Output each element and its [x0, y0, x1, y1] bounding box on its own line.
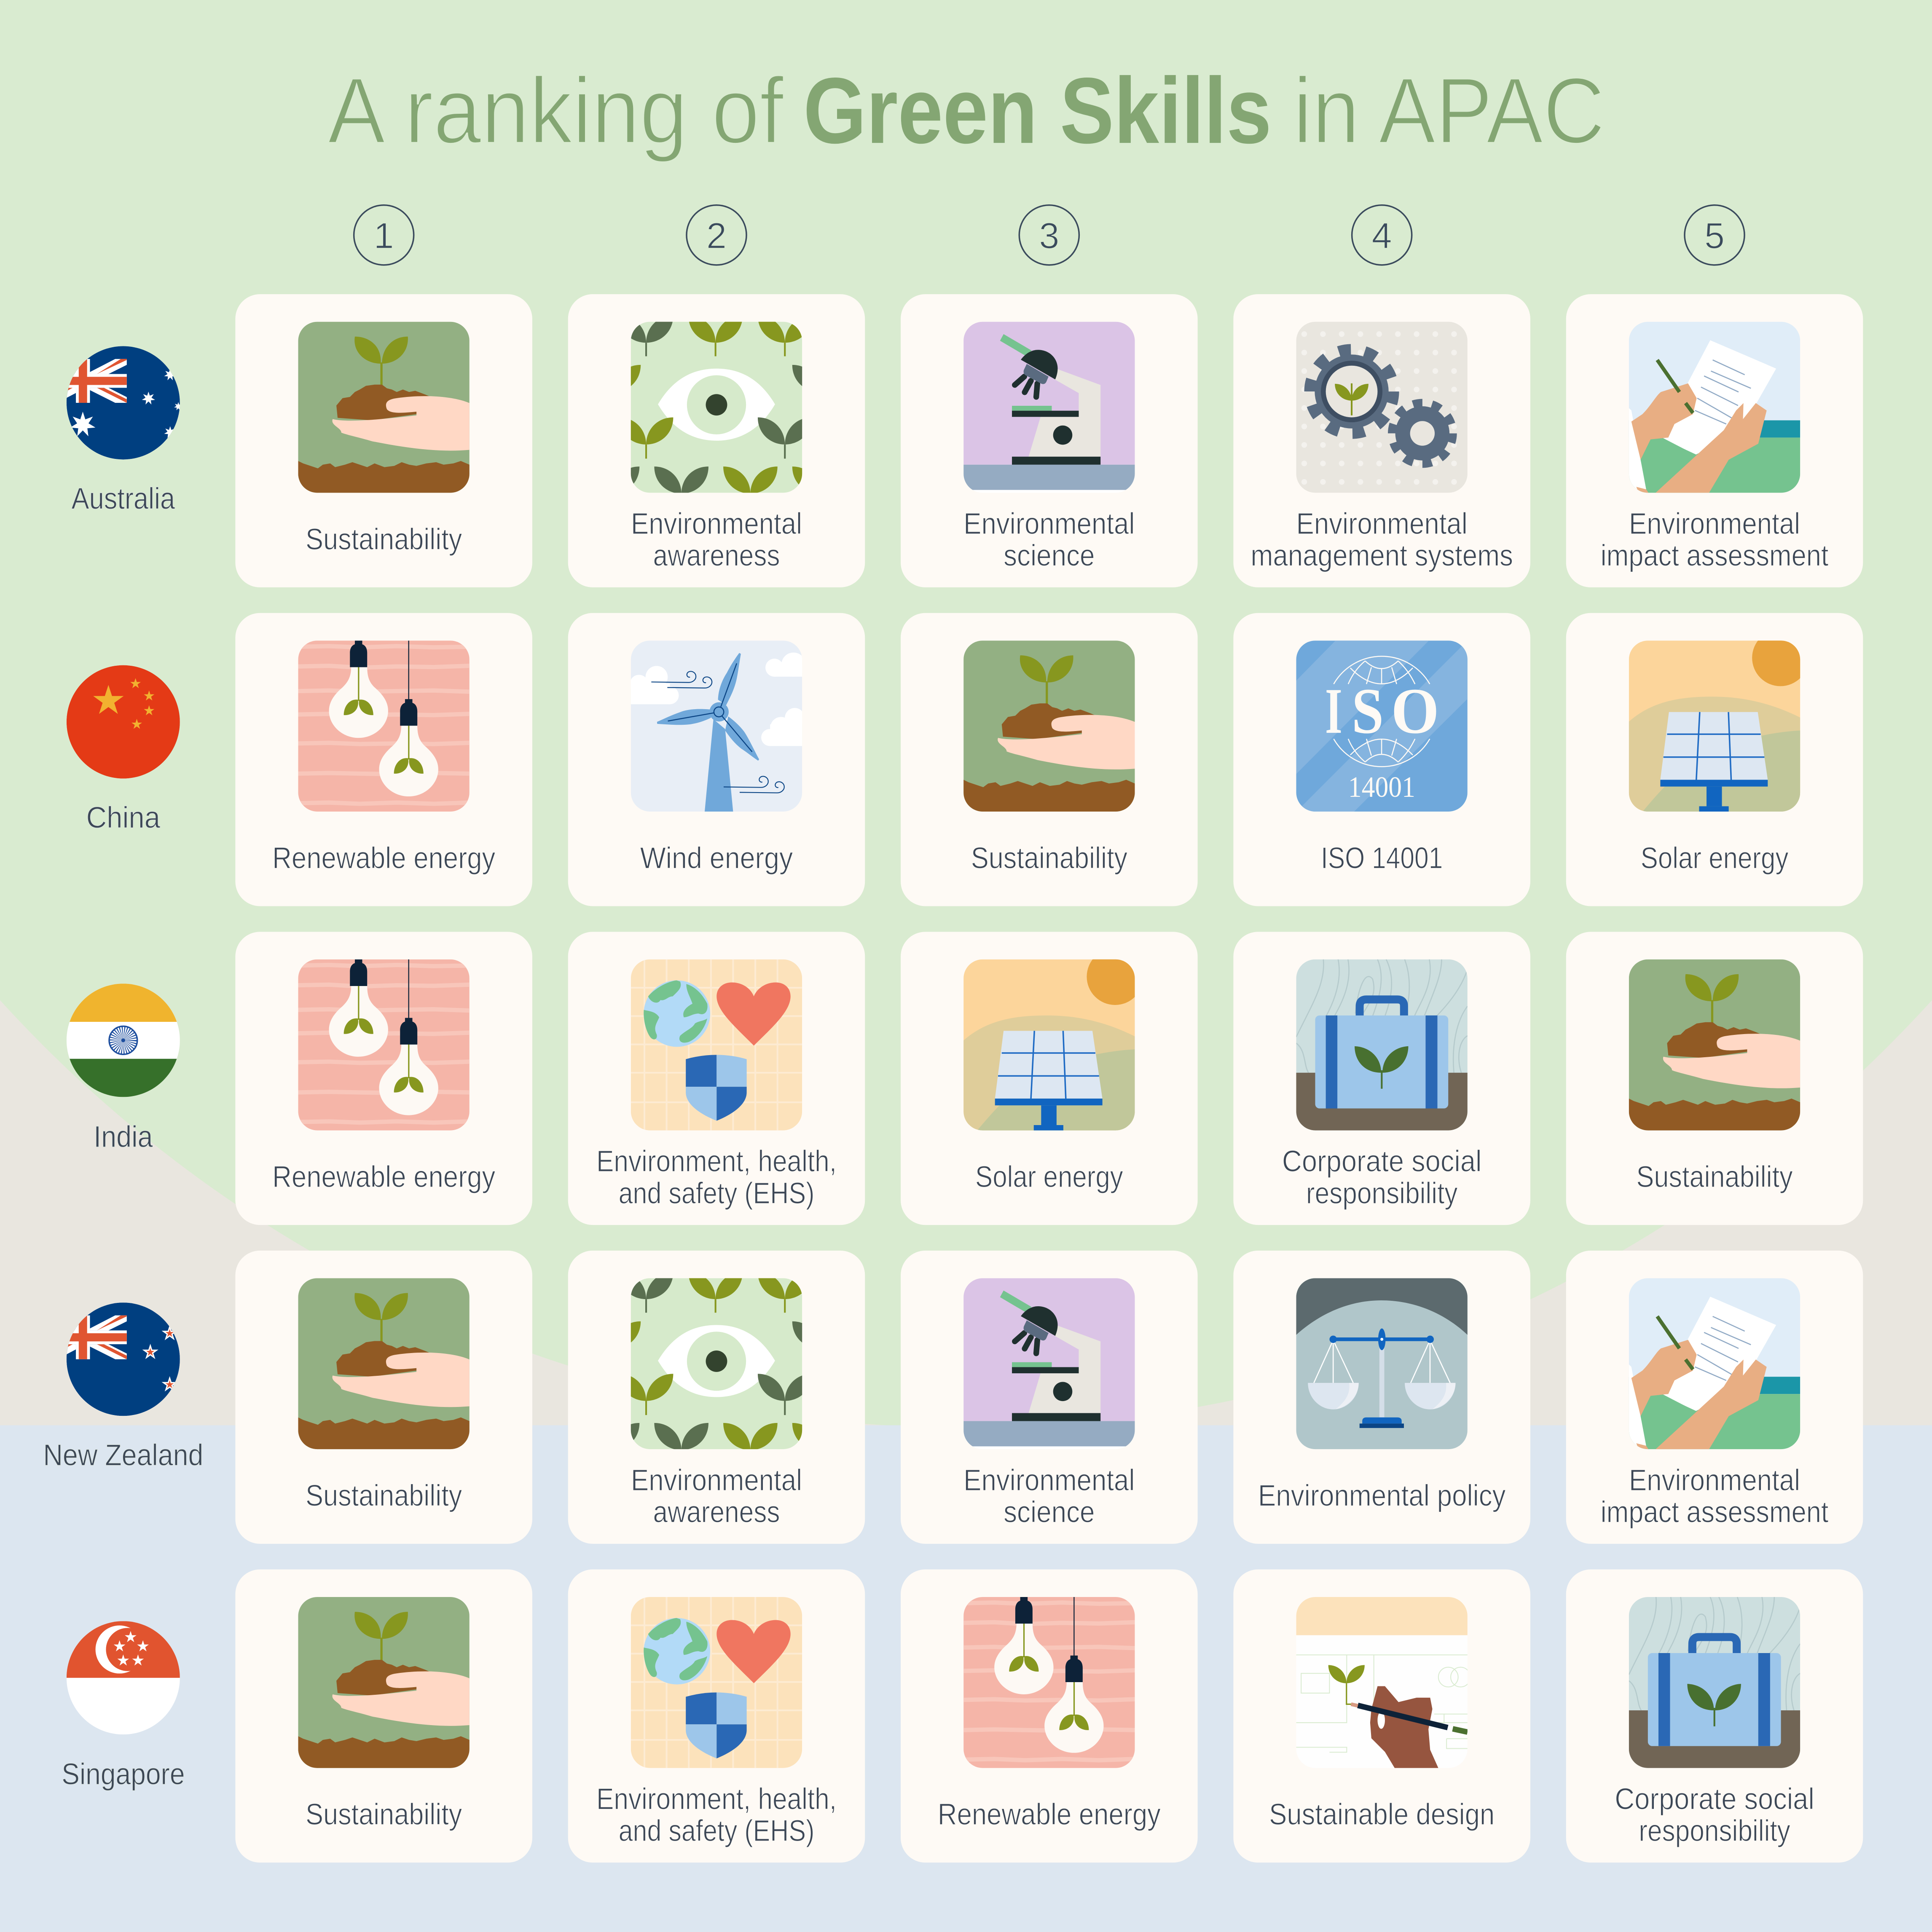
label: Renewable energy [272, 841, 496, 875]
panel: China 1 Renewable energy [235, 613, 532, 906]
icon: sprout in hand [1629, 959, 1800, 1131]
label [1250, 507, 1513, 573]
label: Environmental [1629, 1464, 1800, 1497]
label: science [1004, 1496, 1095, 1529]
label: Environmental [963, 507, 1135, 541]
panel: New Zealand 4 Environmental policy [1233, 1251, 1530, 1544]
icon: hand drawing sprout on blueprint [1296, 1597, 1470, 1768]
rank 3: 3 [1039, 216, 1059, 256]
panel: New Zealand 2 Environmental awareness [568, 1251, 865, 1544]
title: A ranking of [328, 59, 784, 163]
icon: briefcase [1296, 959, 1468, 1131]
icon: sprout in hand [963, 640, 1135, 812]
panel: New Zealand 5 Environmental impact assessment [1566, 1251, 1863, 1544]
icon: gears [1296, 322, 1468, 493]
panel: Singapore 3 Renewable energy [901, 1570, 1198, 1862]
icon: sprout in hand [298, 322, 470, 493]
icon: ISO badge [1296, 640, 1468, 812]
icon: eye and leaves [585, 316, 846, 493]
rank numbers header [354, 205, 1744, 265]
icon: solar panel [963, 948, 1143, 1131]
flag: Singapore [67, 1621, 180, 1734]
panel: India 5 Sustainability [1566, 932, 1863, 1225]
label: Sustainable design [1269, 1798, 1495, 1831]
country label: India: India [94, 1120, 153, 1154]
flag: New Zealand [67, 1302, 180, 1416]
label: Sustainability [306, 1479, 462, 1513]
title: in APAC [1293, 59, 1605, 163]
icon: solar panel [1629, 630, 1809, 812]
icon: microscope [963, 322, 1135, 493]
title: Green Skills [803, 59, 1272, 163]
rank 4 [1352, 205, 1412, 265]
icon: globe heart shield [631, 959, 802, 1131]
flag: India [67, 983, 180, 1097]
panel: China 2 Wind energy [568, 613, 865, 906]
label: Renewable energy [938, 1798, 1161, 1831]
icon: sprout in hand [298, 1278, 470, 1450]
label [631, 507, 802, 573]
label [963, 1464, 1135, 1529]
label: Solar energy [1641, 841, 1789, 875]
rank 3 [1019, 205, 1079, 265]
rank 2 [687, 205, 746, 265]
label: awareness [653, 1496, 780, 1529]
label: science [1004, 539, 1095, 573]
panel: Singapore 5 Corporate social responsibility [1566, 1570, 1863, 1862]
label [596, 1145, 837, 1210]
label: Environmental [631, 1464, 802, 1497]
panel: Australia 2 Environmental awareness [568, 294, 865, 587]
label: responsibility [1639, 1814, 1790, 1848]
label: Environmental [1629, 507, 1800, 541]
country label: New Zealand: New Zealand [43, 1439, 203, 1472]
panel: China 4 ISO 14001 [1233, 613, 1530, 906]
panel: New Zealand 1 Sustainability [235, 1251, 532, 1544]
label: Environmental policy [1258, 1479, 1506, 1513]
icon: balance scales [1296, 1278, 1468, 1450]
label: Environmental [631, 507, 802, 541]
icon: light bulbs [963, 1597, 1135, 1768]
label [631, 1464, 802, 1529]
flag: China [67, 665, 180, 779]
panel: India 2 Environment, health, and safety [568, 932, 865, 1225]
label: Corporate social [1615, 1782, 1814, 1816]
label: impact assessment [1601, 539, 1829, 573]
panel: India 3 Solar energy [901, 932, 1198, 1225]
icon: eye and leaves [585, 1272, 846, 1450]
label: and safety (EHS) [619, 1177, 814, 1210]
country label: Singapore: Singapore [62, 1758, 185, 1791]
label: Sustainability [306, 523, 462, 556]
panel: Singapore 1 Sustainability [235, 1570, 532, 1862]
label: Sustainability [971, 841, 1127, 875]
rank 2: 2 [706, 216, 727, 256]
country label: China: China [86, 801, 161, 835]
label: Sustainability [306, 1798, 462, 1831]
rank 1: 1 [374, 216, 394, 256]
label: Environment, health, [596, 1782, 837, 1816]
label [1601, 1464, 1829, 1529]
rank 1 [354, 205, 414, 265]
panel: Australia 4 Environmental management systems [1233, 294, 1530, 587]
label: and safety (EHS) [619, 1814, 814, 1848]
label: Solar energy [975, 1160, 1123, 1194]
flag: Australia [67, 346, 182, 459]
panel: Australia 3 Environmental science [901, 294, 1198, 587]
label: Environmental [1296, 507, 1468, 541]
label: Corporate social [1282, 1145, 1481, 1178]
icon: microscope [963, 1278, 1135, 1450]
icon: sprout in hand [298, 1597, 470, 1768]
icon: briefcase [1629, 1597, 1800, 1768]
icon: hands writing on paper [1629, 322, 1800, 493]
panel: Singapore 2 Environment, health, and safety [568, 1570, 865, 1862]
label: management systems [1250, 539, 1513, 573]
title [328, 59, 1605, 163]
panel: China 3 Sustainability [901, 613, 1198, 906]
country label: Australia: Australia [72, 482, 175, 515]
panel: Singapore 4 Sustainable design [1233, 1570, 1530, 1862]
icon: globe heart shield [631, 1597, 802, 1768]
label: Environment, health, [596, 1145, 837, 1178]
rank 5: 5 [1704, 216, 1725, 256]
label: Wind energy [640, 841, 793, 875]
label: Sustainability [1636, 1160, 1793, 1194]
label: awareness [653, 539, 780, 573]
panel: Australia 1 Sustainability [235, 294, 532, 587]
label [963, 507, 1135, 573]
rank 5 [1685, 205, 1744, 265]
label: Environmental [963, 1464, 1135, 1497]
icon: light bulbs [298, 640, 470, 812]
icon: light bulbs [298, 959, 470, 1131]
label: Renewable energy [272, 1160, 496, 1194]
rank 4: 4 [1372, 216, 1392, 256]
icon: wind turbine [630, 640, 805, 812]
label [1601, 507, 1829, 573]
icon: hands writing on paper [1629, 1278, 1800, 1450]
panel: Australia 5 Environmental impact assessment [1566, 294, 1863, 587]
label: ISO 14001 [1321, 841, 1443, 875]
label: responsibility [1306, 1177, 1458, 1210]
panel: China 5 Solar energy [1566, 613, 1863, 906]
label [1282, 1145, 1481, 1210]
panel: New Zealand 3 Environmental science [901, 1251, 1198, 1544]
panel: India 4 Corporate social responsibility [1233, 932, 1530, 1225]
label [596, 1782, 837, 1848]
label: impact assessment [1601, 1496, 1829, 1529]
panel: India 1 Renewable energy [235, 932, 532, 1225]
label [1615, 1782, 1814, 1848]
